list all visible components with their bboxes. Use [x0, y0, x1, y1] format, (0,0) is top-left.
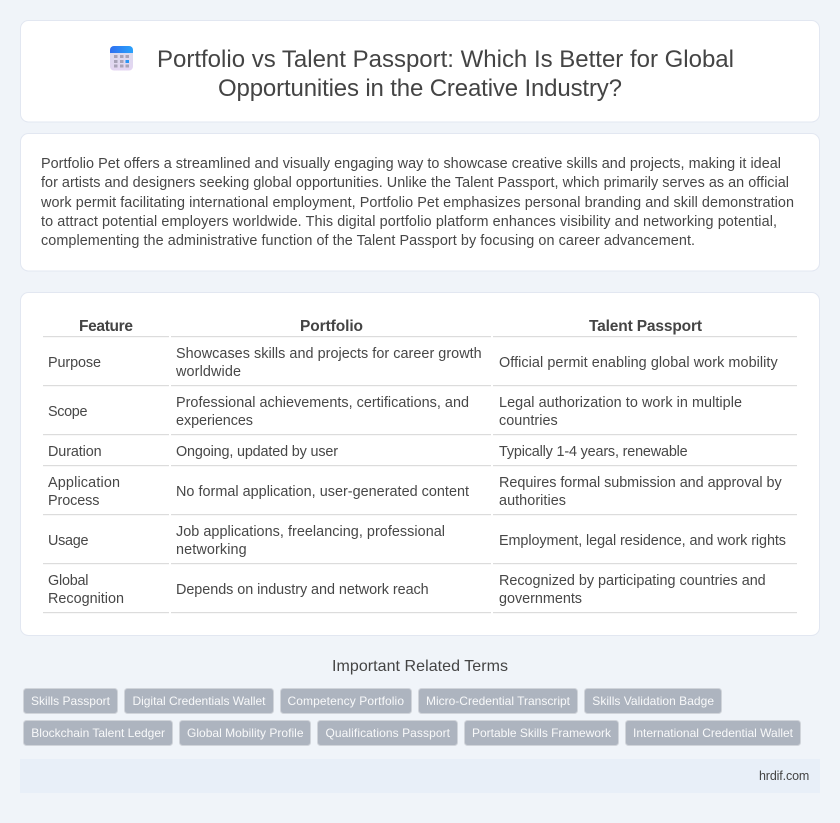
text block: introduction paragraph: for artists and designers seeking global opportunities. Unlike the Talent Passport, which primarily serves as an official — [41, 175, 789, 191]
tag: qualifications passport — [318, 720, 458, 746]
table row: global recognition: Recognition — [48, 591, 124, 607]
tag: portable skills framework: Portable Skills Framework — [472, 726, 612, 740]
title — [157, 46, 734, 102]
table row: application process: Application — [48, 475, 120, 491]
tag: digital credentials wallet: Digital Credentials Wallet — [132, 694, 266, 708]
tag: international credential wallet: International Credential Wallet — [633, 726, 794, 740]
tag: international credential wallet — [626, 720, 800, 746]
tag: skills validation badge: Skills Validation Badge — [592, 694, 714, 708]
tag: global mobility profile: Global Mobility Profile — [187, 726, 304, 740]
table row: application process: Process — [48, 493, 100, 509]
table row: global recognition: Depends on industry and network reach — [176, 582, 429, 598]
table row: scope: countries — [499, 413, 558, 429]
table row: global recognition: Recognized by participating countries and — [499, 573, 766, 589]
table header row: Talent Passport — [589, 318, 702, 335]
table row: purpose: Showcases skills and projects for career growth — [176, 346, 482, 362]
table row: scope: Scope — [48, 404, 88, 420]
tag: competency portfolio — [280, 688, 412, 714]
table row: duration: Duration — [48, 444, 102, 460]
tag: global mobility profile — [180, 720, 310, 746]
table row: usage: networking — [176, 542, 247, 558]
table row: scope: Legal authorization to work in multiple — [499, 395, 742, 411]
table row: scope — [43, 395, 797, 435]
table header row: Portfolio — [300, 318, 363, 335]
tag: digital credentials wallet — [124, 688, 274, 714]
text block: introduction paragraph — [40, 156, 794, 249]
tag: micro-credential transcript — [418, 688, 578, 714]
footer — [20, 759, 820, 793]
table row: usage: Job applications, freelancing, professional — [176, 524, 445, 540]
tag: micro-credential transcript: Micro-Credential Transcript — [426, 694, 571, 708]
tag: skills passport: Skills Passport — [31, 694, 111, 708]
table row: usage: Usage — [48, 533, 88, 549]
tag: skills validation badge — [584, 688, 722, 714]
table header row: Feature — [79, 318, 133, 335]
table row: duration — [43, 444, 797, 466]
title: Portfolio vs Talent Passport: Which Is Better for Global — [157, 46, 734, 73]
text block: introduction paragraph: work permit facilitating international employment, Portfolio Pet emphasizes personal branding and skill demonstration — [40, 195, 794, 211]
text block: introduction paragraph: complementing the administrative function of the Talent Passport by focusing on career advancement. — [41, 233, 695, 249]
table row: purpose: worldwide — [175, 364, 241, 380]
tag: blockchain talent ledger: Blockchain Talent Ledger — [31, 726, 165, 740]
table row: usage: Employment, legal residence, and work rights — [499, 533, 786, 549]
table row: application process: authorities — [499, 493, 566, 509]
table row: duration: Typically 1-4 years, renewable — [499, 444, 688, 460]
table header row — [43, 318, 797, 337]
panel: comparison table — [20, 292, 820, 636]
heading: important related terms: Important Related Terms — [332, 658, 508, 675]
table row: application process: Requires formal submission and approval by — [499, 475, 782, 491]
table row: global recognition: governments — [499, 591, 582, 607]
table row: scope: Professional achievements, certifications, and — [176, 395, 469, 411]
table row: usage — [43, 524, 797, 564]
table row: purpose: Official permit enabling global work mobility — [499, 355, 778, 371]
icon: calendar — [110, 46, 133, 70]
tag: qualifications passport: Qualifications Passport — [326, 726, 451, 740]
panel: introduction — [20, 134, 820, 271]
table row: purpose — [43, 346, 797, 386]
tag: blockchain talent ledger — [24, 720, 172, 746]
text block: introduction paragraph: Portfolio Pet offers a streamlined and visually engaging way to showcase creative skills and projects, making it ideal — [41, 156, 781, 172]
table row: duration: Ongoing, updated by user — [176, 444, 338, 460]
panel: title header — [20, 20, 820, 122]
table row: application process — [43, 475, 797, 515]
tag group: related terms — [24, 688, 800, 746]
table row: purpose: Purpose — [48, 355, 101, 371]
table row: global recognition: Global — [48, 573, 88, 589]
footer: hrdif.com — [759, 769, 809, 783]
tag: skills passport — [24, 688, 118, 714]
table row: global recognition — [43, 573, 797, 613]
tag: competency portfolio: Competency Portfolio — [288, 694, 404, 708]
text block: introduction paragraph: to attract potential employers worldwide. This digital portfolio platform enhances visibility and networking potential, — [41, 214, 777, 230]
title: Opportunities in the Creative Industry? — [218, 75, 622, 102]
table row: scope: experiences — [176, 413, 253, 429]
table row: application process: No formal application, user-generated content — [176, 484, 469, 500]
tag: portable skills framework — [464, 720, 618, 746]
